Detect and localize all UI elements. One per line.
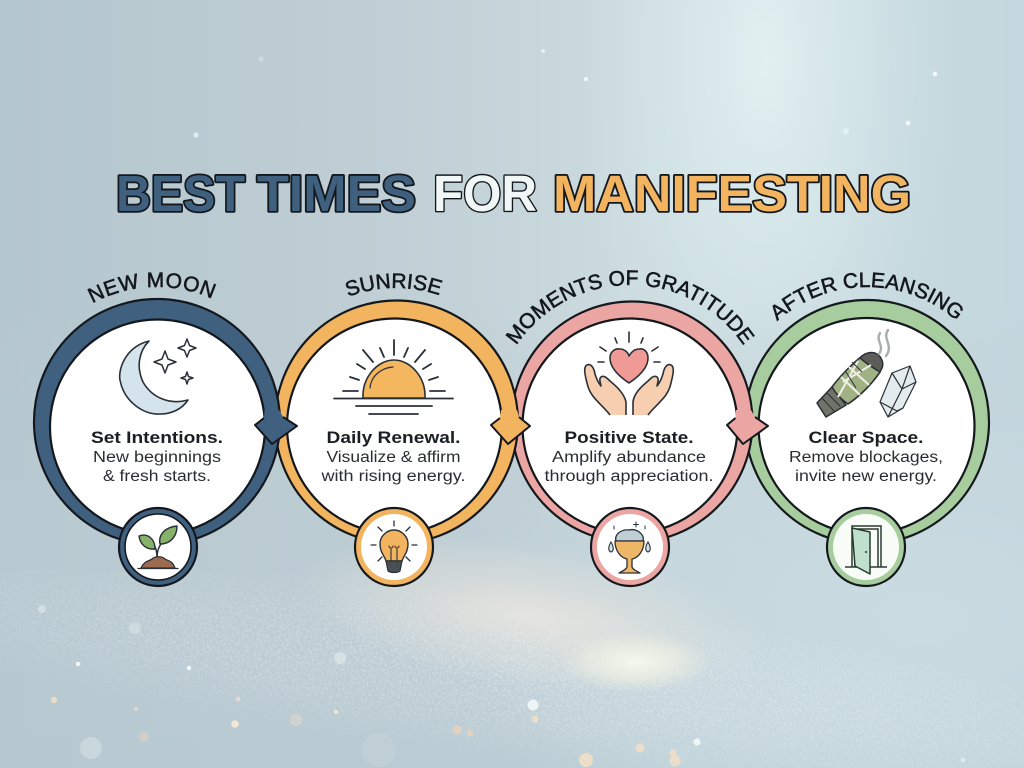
icon: open hands bbox=[585, 365, 673, 415]
arrow: pink bbox=[727, 410, 768, 444]
icon: smoke bbox=[879, 330, 889, 356]
arrow outline: navy bbox=[255, 417, 297, 444]
text: clear space description: invite new energy. bbox=[795, 468, 937, 485]
label: new moon: NEW MOON bbox=[87, 272, 216, 303]
text: clear space description: Remove blockages, bbox=[789, 449, 943, 466]
title: TIMES bbox=[257, 165, 416, 222]
panel: new moon bbox=[32, 272, 298, 588]
arrow: navy bbox=[255, 410, 297, 444]
icon: heart with rays bbox=[598, 332, 660, 383]
ring: navy bbox=[34, 299, 280, 545]
panel: sunrise bbox=[278, 273, 531, 588]
badge: sprout bbox=[119, 508, 197, 586]
arrow outline: orange bbox=[491, 417, 530, 444]
icon: crystal bbox=[880, 366, 916, 417]
arrow: orange bbox=[491, 410, 530, 444]
badge: door bbox=[827, 508, 905, 586]
arrow outline: pink bbox=[727, 417, 768, 444]
text: set intentions description bbox=[93, 449, 221, 485]
icon: stars bbox=[154, 339, 196, 384]
icon: crescent moon bbox=[120, 341, 188, 414]
text: daily renewal description: Visualize & affirm bbox=[326, 449, 460, 466]
text: positive state description: through appreciation. bbox=[544, 468, 714, 485]
text: clear space description bbox=[789, 449, 943, 485]
text: daily renewal description bbox=[320, 449, 466, 485]
heading: daily renewal: Daily Renewal. bbox=[326, 428, 460, 447]
title: MANIFESTING bbox=[553, 165, 911, 222]
title bbox=[116, 165, 911, 222]
text: positive state description bbox=[544, 449, 714, 485]
label: moments of gratitude: MOMENTS OF GRATITUDE bbox=[505, 270, 755, 346]
heading: set intentions: Set Intentions. bbox=[91, 428, 223, 447]
heading: positive state: Positive State. bbox=[564, 428, 694, 447]
title: BEST bbox=[116, 165, 245, 222]
title: FOR bbox=[433, 165, 537, 222]
ring: pink bbox=[512, 302, 752, 542]
badge: lightbulb bbox=[355, 508, 433, 586]
text: daily renewal description: with rising energy. bbox=[320, 468, 466, 485]
ring: green bbox=[745, 300, 989, 544]
label: after cleansing: AFTER CLEANSING bbox=[772, 272, 963, 322]
badge: chalice bbox=[591, 508, 669, 586]
text: positive state description: Amplify abundance bbox=[552, 449, 706, 466]
text: set intentions description: New beginnings bbox=[93, 449, 221, 466]
panel: moments of gratitude bbox=[505, 270, 769, 588]
icon: sunrise bbox=[334, 340, 453, 414]
heading: clear space: Clear Space. bbox=[808, 428, 924, 447]
icon: sage bundle bbox=[817, 353, 883, 417]
text: set intentions description: & fresh starts. bbox=[103, 468, 211, 485]
panel: after cleansing bbox=[748, 272, 990, 588]
label: sunrise: SUNRISE bbox=[346, 273, 443, 296]
ring: orange bbox=[275, 300, 518, 544]
